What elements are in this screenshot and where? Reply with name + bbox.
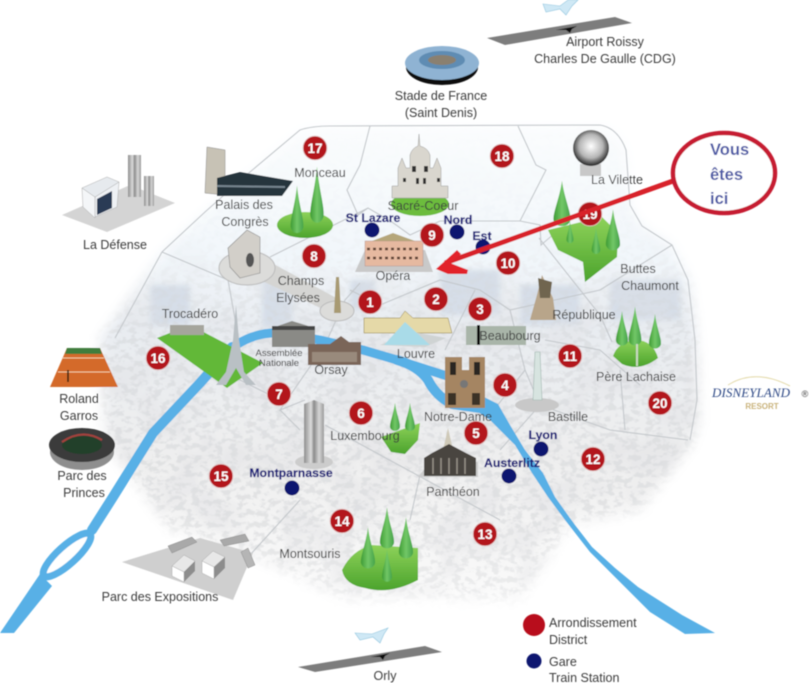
icon: park bbox=[548, 181, 620, 282]
station: lyon: Lyon bbox=[529, 428, 557, 442]
label: Trocadéro bbox=[162, 307, 218, 321]
badge 3: 3 bbox=[476, 302, 484, 317]
river Seine bbox=[0, 333, 715, 634]
badge 10 bbox=[496, 251, 520, 275]
roland garros bbox=[50, 348, 118, 423]
station: est bbox=[472, 229, 492, 254]
runway bbox=[487, 17, 632, 45]
badge 13: 13 bbox=[477, 527, 493, 542]
badge 6 bbox=[349, 401, 373, 425]
label: Panthéon bbox=[426, 485, 480, 499]
badge 16: 16 bbox=[150, 351, 166, 366]
label: (Saint Denis) bbox=[405, 106, 477, 120]
beaubourg bbox=[466, 325, 541, 345]
callout text: Vous bbox=[710, 141, 749, 159]
river: upper bend bbox=[236, 333, 447, 376]
station: montparnasse: Montparnasse bbox=[249, 466, 333, 480]
legend bbox=[523, 614, 637, 683]
station: montparnasse bbox=[249, 466, 333, 496]
district boundaries bbox=[115, 125, 697, 555]
icon: basilica bbox=[391, 134, 449, 216]
icon: plane shadow bbox=[371, 653, 390, 660]
river: downstream bbox=[0, 574, 52, 633]
station: est: Est bbox=[472, 229, 492, 243]
label: Palais des bbox=[215, 198, 273, 212]
palais des congres bbox=[205, 147, 293, 229]
label: Orsay bbox=[314, 363, 348, 377]
icon: park bbox=[613, 306, 661, 367]
orsay bbox=[308, 336, 361, 377]
bastille bbox=[515, 352, 588, 424]
buttes chaumont bbox=[548, 181, 679, 293]
badge 5: 5 bbox=[472, 426, 480, 441]
badge 12 bbox=[581, 447, 605, 471]
icon: building bbox=[205, 147, 293, 196]
icon: plane bbox=[543, 0, 578, 15]
icon: building bbox=[424, 428, 476, 476]
icon: park bbox=[342, 507, 418, 590]
label: Parc des Expositions bbox=[102, 590, 218, 604]
label: Assemblée bbox=[256, 348, 302, 359]
icon: statue bbox=[530, 275, 556, 320]
legend: district: Arrondissement bbox=[549, 616, 637, 630]
parc monceau bbox=[277, 166, 346, 238]
river: south arm bbox=[397, 360, 480, 408]
label: Garros bbox=[60, 409, 98, 423]
label: Chaumont bbox=[621, 279, 679, 293]
airport roissy bbox=[487, 0, 676, 66]
wordmark: DISNEYLAND bbox=[711, 385, 791, 400]
badge 19 bbox=[578, 202, 602, 226]
trocadero bbox=[157, 305, 263, 388]
base bbox=[295, 455, 333, 469]
plaza bbox=[219, 251, 275, 285]
icon: cathedral bbox=[445, 357, 485, 408]
station: lyon bbox=[529, 428, 557, 456]
avenue bbox=[260, 262, 340, 310]
icon: stadium bbox=[49, 428, 115, 470]
badge 5 bbox=[464, 421, 488, 445]
base bbox=[515, 398, 559, 412]
label: Monceau bbox=[294, 166, 346, 180]
notre dame bbox=[424, 357, 492, 424]
badge 4 bbox=[493, 373, 517, 397]
icon: park bbox=[381, 403, 420, 454]
icon: building bbox=[466, 326, 526, 345]
icon: towers bbox=[62, 155, 175, 232]
badge 17: 17 bbox=[307, 141, 323, 156]
la defense bbox=[62, 155, 175, 252]
river: lower bbox=[478, 395, 715, 634]
plaza: obelisk bbox=[320, 301, 354, 321]
callout text: êtes bbox=[710, 166, 743, 184]
station: st lazare: St Lazare bbox=[346, 211, 400, 225]
label: Notre-Dame bbox=[424, 410, 492, 424]
badge 4: 4 bbox=[501, 378, 509, 393]
badge 20 bbox=[648, 391, 672, 415]
label: Elysées bbox=[276, 291, 320, 305]
label: Père Lachaise bbox=[596, 370, 676, 384]
arc bbox=[728, 377, 790, 386]
label: Champs bbox=[278, 274, 324, 288]
ring bbox=[673, 133, 775, 213]
garden bbox=[157, 325, 263, 388]
badge 6: 6 bbox=[357, 406, 365, 421]
label: La Vilette bbox=[591, 173, 643, 187]
panel: city map base bbox=[90, 120, 710, 610]
republique bbox=[530, 275, 616, 322]
label: Airport Roissy bbox=[566, 35, 645, 49]
badge 10: 10 bbox=[500, 256, 516, 271]
label: Beaubourg bbox=[479, 329, 541, 343]
icon: arc bbox=[228, 230, 260, 278]
station: nord: Nord bbox=[444, 213, 472, 227]
station markers bbox=[249, 211, 557, 496]
icon: building bbox=[308, 336, 361, 365]
icon: building bbox=[170, 325, 204, 335]
label: Sacré-Coeur bbox=[388, 199, 458, 213]
icon: plane shadow bbox=[556, 26, 577, 33]
label: Orly bbox=[374, 669, 397, 683]
disneyland logo bbox=[711, 377, 809, 411]
badge 3 bbox=[468, 297, 492, 321]
icon: column bbox=[533, 352, 542, 400]
trademark: ® bbox=[802, 389, 809, 399]
badge 17 bbox=[303, 136, 327, 160]
label: Bastille bbox=[548, 410, 588, 424]
label: Buttes bbox=[620, 262, 656, 276]
label: Louvre bbox=[397, 347, 435, 361]
label: La Défense bbox=[83, 238, 147, 252]
label: Luxembourg bbox=[330, 429, 400, 443]
icon: obelisk bbox=[334, 277, 341, 313]
badge 15 bbox=[209, 464, 233, 488]
plaza bbox=[380, 332, 446, 347]
icon: building bbox=[355, 233, 433, 272]
icon: halls bbox=[168, 534, 255, 582]
badge 11: 11 bbox=[563, 349, 578, 364]
label: Stade de France bbox=[395, 89, 487, 103]
legend: station bbox=[526, 654, 619, 683]
badge 16 bbox=[146, 346, 170, 370]
badge 2 bbox=[424, 287, 448, 311]
label: Congrès bbox=[221, 215, 269, 229]
station: austerlitz bbox=[484, 456, 540, 484]
icon: building bbox=[272, 321, 315, 347]
badge 8 bbox=[302, 244, 326, 268]
montsouris bbox=[279, 507, 418, 590]
luxembourg bbox=[330, 403, 420, 454]
icon: arch opening bbox=[246, 253, 254, 267]
badge 2: 2 bbox=[432, 292, 440, 307]
station: nord bbox=[444, 213, 472, 240]
label: Montsouris bbox=[279, 547, 341, 561]
badge 18: 18 bbox=[494, 149, 510, 164]
badge 14 bbox=[330, 509, 354, 533]
pantheon bbox=[418, 428, 480, 499]
icon: base bbox=[580, 164, 601, 176]
label: Princes bbox=[63, 486, 105, 500]
icon: sphere bbox=[573, 130, 609, 166]
icon: stadium bbox=[405, 46, 479, 85]
parc des expositions bbox=[102, 534, 255, 604]
assemblee nationale bbox=[256, 321, 315, 369]
legend: district: District bbox=[549, 633, 588, 647]
label: Opéra bbox=[376, 269, 410, 283]
badge 12: 12 bbox=[585, 452, 601, 467]
palace bbox=[364, 311, 452, 333]
icon: park bbox=[277, 166, 333, 238]
badge 1 bbox=[358, 290, 382, 314]
pere lachaise bbox=[596, 306, 676, 384]
parc des princes bbox=[49, 428, 115, 500]
louvre bbox=[364, 311, 452, 361]
label: Roland bbox=[59, 392, 99, 406]
station: st lazare bbox=[346, 211, 400, 238]
river: left channel bbox=[92, 347, 232, 530]
stade de france bbox=[395, 46, 487, 120]
airport orly bbox=[298, 628, 442, 683]
river: island loop bbox=[38, 528, 96, 582]
icon: pillar bbox=[477, 325, 480, 345]
callout text: ici bbox=[710, 190, 728, 208]
badge 20: 20 bbox=[652, 396, 668, 411]
icon: pyramid bbox=[384, 322, 430, 345]
runway bbox=[298, 646, 442, 672]
badge 14: 14 bbox=[334, 514, 350, 529]
callout: you are here bbox=[436, 133, 775, 274]
badge 8: 8 bbox=[310, 249, 318, 264]
badge 13 bbox=[473, 522, 497, 546]
tour montparnasse bbox=[295, 400, 333, 469]
arc de triomphe and avenue bbox=[219, 230, 354, 321]
station: austerlitz: Austerlitz bbox=[484, 456, 540, 470]
badge 9: 9 bbox=[428, 228, 436, 243]
badge 7 bbox=[267, 382, 291, 406]
badge 1: 1 bbox=[366, 295, 374, 310]
label: Charles De Gaulle (CDG) bbox=[534, 52, 676, 66]
la villette bbox=[573, 130, 643, 187]
resort: RESORT bbox=[745, 402, 779, 411]
legend: district bbox=[523, 614, 637, 647]
icon: tennis court bbox=[50, 348, 118, 387]
badge 15: 15 bbox=[213, 469, 229, 484]
badge 18 bbox=[490, 144, 514, 168]
badge 9 bbox=[420, 223, 444, 247]
label: République bbox=[552, 308, 616, 322]
badge 19: 19 bbox=[582, 207, 598, 222]
badge 7: 7 bbox=[275, 387, 283, 402]
arrow bbox=[436, 181, 673, 274]
legend: station: Gare bbox=[549, 655, 577, 669]
district badges bbox=[146, 136, 672, 546]
sacre coeur bbox=[388, 134, 458, 216]
icon: plane bbox=[355, 628, 388, 643]
label: Parc des bbox=[57, 469, 107, 483]
floor bbox=[122, 538, 253, 600]
opera bbox=[355, 233, 433, 283]
badge 11 bbox=[558, 344, 582, 368]
label line 2: Nationale bbox=[259, 358, 299, 369]
icon: tower bbox=[304, 400, 324, 463]
plaza bbox=[418, 462, 478, 477]
icon: eiffel tower bbox=[216, 305, 256, 385]
